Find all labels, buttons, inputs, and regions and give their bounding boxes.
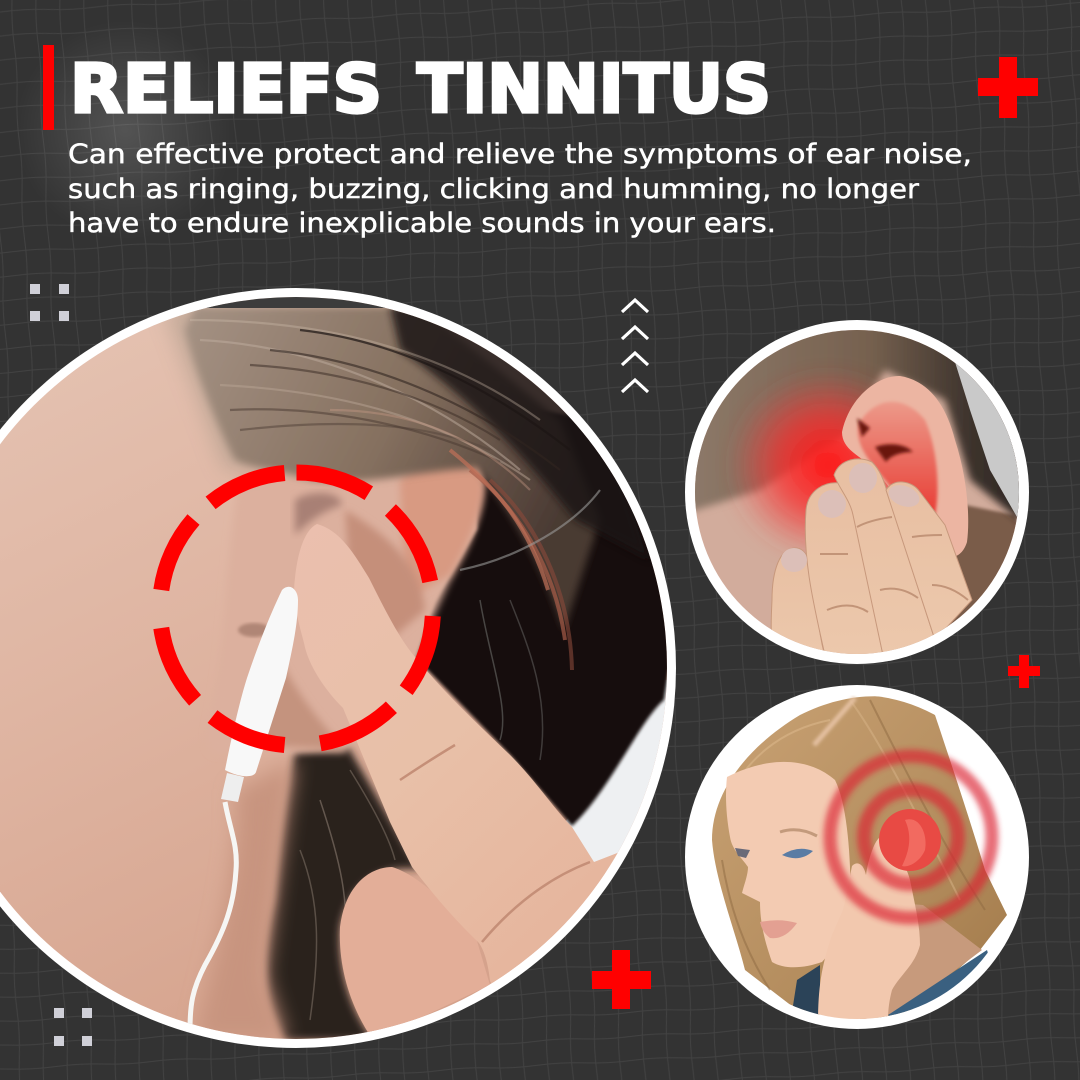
ear inner — [858, 402, 938, 516]
accent bar — [43, 45, 54, 130]
ear inner lower shadow — [268, 670, 344, 755]
title: RELIEFS — [70, 50, 382, 128]
panel: woman holding ear photo — [685, 685, 1030, 1030]
neck shadow — [195, 760, 295, 1040]
hand — [818, 837, 920, 1025]
title: TINNITUS — [417, 50, 771, 128]
soft hair edge — [165, 300, 260, 470]
ear — [842, 376, 968, 557]
grey brown hair — [185, 306, 600, 630]
ear crease top — [295, 493, 342, 535]
black hair — [416, 400, 680, 826]
neck — [940, 504, 1017, 632]
lips — [760, 920, 797, 938]
finger: middle — [834, 459, 935, 660]
eye left — [735, 848, 750, 858]
callout: red dashed circle — [161, 472, 433, 745]
thumb — [340, 867, 490, 1040]
hair strands — [190, 320, 600, 1020]
description text — [68, 139, 972, 239]
icon: plus top right — [978, 57, 1038, 118]
description text: have to endure inexplicable sounds in your ears. — [68, 208, 776, 239]
finger: ring — [805, 483, 884, 660]
photo background white — [566, 680, 666, 872]
finger knuckle crease — [400, 745, 590, 942]
denim clothing left — [790, 965, 820, 1025]
photo top edge band — [206, 297, 386, 308]
knuckle creases — [820, 517, 968, 612]
grey backdrop — [955, 363, 1019, 517]
description text: Can effective protect and relieve the symptoms of ear noise, — [68, 139, 972, 170]
icon: plus small right — [1008, 655, 1040, 688]
buzz cut hair — [695, 330, 1019, 524]
lower dark hair — [266, 745, 420, 1040]
ear canal — [238, 623, 270, 637]
eye right — [782, 849, 813, 858]
finger: index — [886, 482, 972, 640]
ear right inner shadow — [345, 510, 425, 640]
panel: ear pain photo — [680, 315, 1030, 665]
eyebrow — [780, 830, 817, 836]
sound rings — [830, 756, 992, 918]
hair strands — [722, 700, 985, 990]
hair — [712, 696, 1007, 1020]
denim clothing right — [888, 950, 995, 1025]
finger: pinky — [770, 548, 824, 650]
red glow — [732, 372, 888, 552]
neck — [860, 900, 982, 1020]
hair part — [814, 698, 855, 745]
panel: main ear photo — [0, 280, 690, 1060]
decorative dots bottom left — [54, 1008, 92, 1046]
earphone connector — [221, 773, 244, 802]
fingernails — [781, 463, 922, 572]
icon: plus bottom — [592, 950, 651, 1009]
red ear — [879, 809, 941, 871]
title — [70, 50, 771, 128]
dark hair streaks top right — [390, 306, 650, 560]
description text: such as ringing, buzzing, clicking and humming, no longer — [68, 174, 920, 205]
icon: upward chevrons — [622, 300, 648, 392]
face — [726, 762, 851, 967]
index finger and hand — [294, 524, 640, 1000]
ear — [240, 466, 488, 758]
ear dark hollows — [857, 418, 913, 462]
wire — [190, 802, 236, 1030]
decorative dots top left — [30, 284, 69, 321]
ear detail — [902, 819, 926, 866]
ear upper pink — [400, 452, 484, 600]
earphone stalk — [225, 587, 298, 776]
